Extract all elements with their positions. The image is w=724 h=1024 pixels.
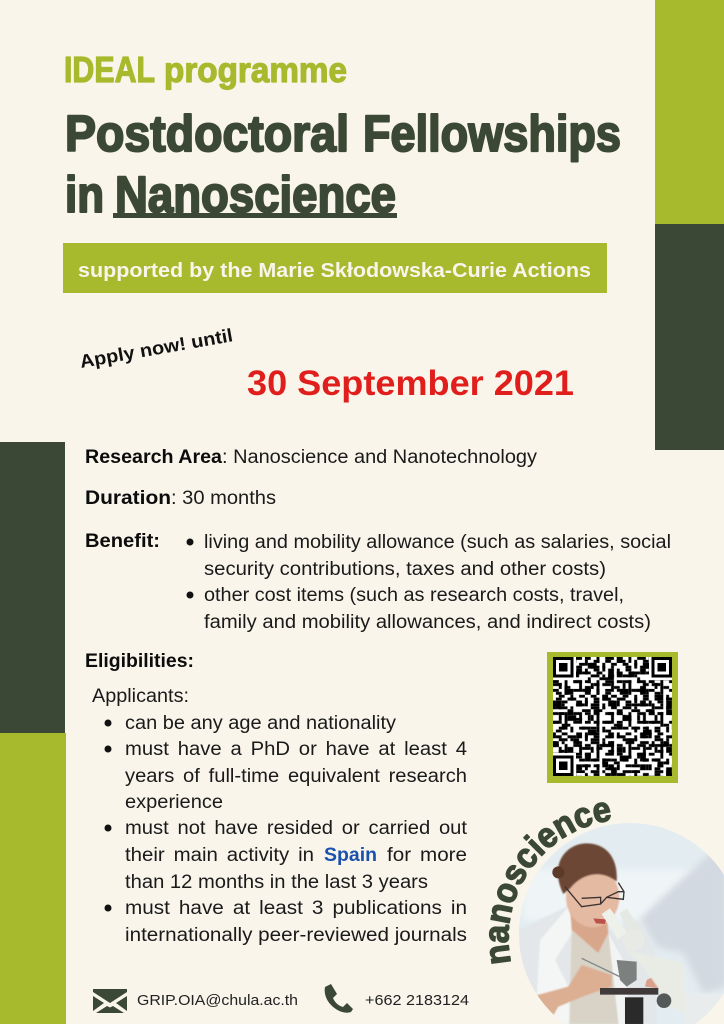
- neck: [570, 912, 609, 954]
- text: benefit: other cost items (such as research costs, travel,: [204, 585, 624, 606]
- heading: eligibilities: Eligibilities:: [85, 651, 194, 672]
- hair: [558, 843, 617, 894]
- text: benefit: security contributions, taxes and other costs): [204, 559, 606, 580]
- banner: supported by: supported by the Marie Skłodowska-Curie Actions: [78, 259, 591, 282]
- panel: left green bar: [0, 733, 66, 1024]
- microscope: [602, 908, 627, 940]
- heading: IDEAL programme: IDEAL: [64, 49, 155, 90]
- panel: right dark bar: [655, 224, 724, 450]
- text: applicants list: their main activity in: [125, 845, 314, 866]
- banner: supported by: [63, 243, 607, 293]
- title: in: [65, 166, 104, 223]
- title: Nanoscience: [115, 166, 396, 223]
- QR code: [547, 652, 678, 783]
- text: applicants list: can be any age and nationality: [125, 713, 397, 734]
- text: phone number: +662 2183124: [365, 992, 469, 1009]
- text: duration: Duration: [85, 488, 171, 509]
- heading: IDEAL programme: [64, 49, 347, 90]
- photo: scientist at microscope: [513, 820, 724, 1024]
- title: Fellowships: [363, 105, 621, 162]
- text: applicants list: must not have resided or carried out: [125, 818, 468, 839]
- curve guide for text: [508, 820, 614, 963]
- face: [566, 867, 619, 927]
- text: benefit: [85, 531, 671, 633]
- arm and hand: [537, 964, 612, 1015]
- text: applicants list: Applicants:: [92, 686, 189, 707]
- text: benefit: Benefit:: [85, 531, 160, 552]
- text: research area: Research Area: [85, 447, 222, 468]
- text: applicants list: for more: [387, 845, 467, 866]
- text: applicants list: Spain: [324, 845, 377, 866]
- text: apply now: Apply now! until: [78, 324, 234, 372]
- text: applicants list: must have at least 3 publications in: [125, 898, 467, 919]
- lab coat: [532, 907, 638, 925]
- text: research area: [85, 447, 538, 468]
- panel: left dark bar: [0, 442, 65, 733]
- text: applicants list: internationally peer-reviewed journals: [125, 925, 467, 946]
- text: applicants list: years of full-time equivalent research: [125, 766, 467, 787]
- icon: mail: [93, 989, 127, 1013]
- heading: IDEAL programme: programme: [164, 51, 347, 90]
- glasses: [565, 883, 624, 907]
- text: applicants list: than 12 months in the last 3 years: [125, 872, 428, 893]
- text: applicants list: must have a PhD or have at least 4: [125, 739, 467, 760]
- text: applicants list: experience: [125, 792, 223, 813]
- text: benefit: living and mobility allowance (such as salaries, social: [204, 532, 671, 553]
- text: duration: [85, 488, 276, 509]
- curved text: nanoscience: nanoscience: [488, 802, 611, 964]
- panel: right green bar: [655, 0, 724, 224]
- shirt: [569, 930, 618, 1024]
- blurred colleague: [640, 853, 724, 993]
- text: duration: : 30 months: [171, 488, 276, 509]
- deadline date: 30 September 2021: [247, 364, 574, 403]
- title: [65, 105, 621, 223]
- text: benefit: family and mobility allowances, and indirect costs): [204, 612, 651, 633]
- title: Postdoctoral: [65, 105, 349, 162]
- text: email: GRIP.OIA@chula.ac.th: [137, 992, 298, 1009]
- icon: phone: [325, 984, 353, 1013]
- text: applicants list: [92, 686, 468, 946]
- text: research area: : Nanoscience and Nanotechnology: [222, 447, 538, 468]
